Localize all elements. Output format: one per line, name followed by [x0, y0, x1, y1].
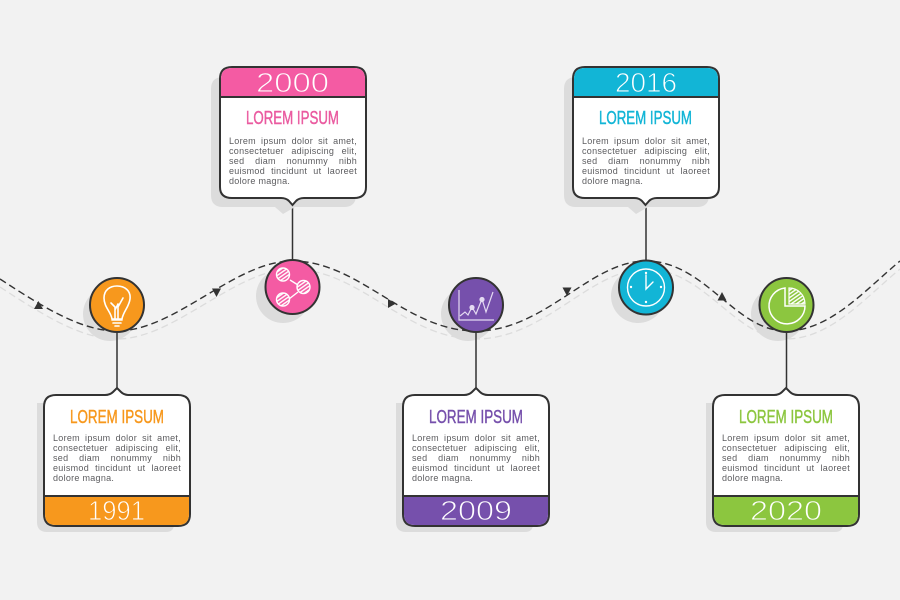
- panel: 1991: [37, 387, 191, 532]
- panel: 2000: consectetuer adipiscing elit,: [229, 146, 357, 156]
- timeline shadow path: [0, 269, 900, 339]
- icon: light bulb node: [90, 278, 144, 332]
- panel: 2009: consectetuer adipiscing elit,: [412, 443, 540, 453]
- panel: 2020: Lorem ipsum dolor sit amet,: [722, 433, 850, 443]
- panel: 2020: euismod tincidunt ut laoreet: [722, 463, 850, 473]
- arrow 3: [388, 299, 396, 308]
- panel: 2000: dolore magna.: [229, 176, 290, 186]
- timeline dashed path: [0, 261, 900, 331]
- panel: 2000: euismod tincidunt ut laoreet: [229, 166, 357, 176]
- panel: 1991: 1991: [88, 495, 145, 526]
- panel: 2000: 2000: [256, 67, 329, 98]
- connector lines: [117, 204, 786, 389]
- arrow 1: [34, 301, 43, 309]
- panel: 2016: [564, 66, 720, 214]
- panel: 2020: [706, 386, 860, 532]
- panel: 2020: 2020: [750, 495, 822, 526]
- panel: 2009: 2009: [440, 495, 512, 526]
- circle shadows: [83, 269, 805, 341]
- icon: line chart node: [449, 278, 503, 332]
- panel: 2020: dolore magna.: [722, 473, 783, 483]
- panel: 2016: sed diam nonummy nibh: [582, 156, 710, 166]
- panel: 2000: [211, 66, 367, 214]
- panel: 2016: consectetuer adipiscing elit,: [582, 146, 710, 156]
- panel: 2009: [396, 387, 550, 532]
- icon: pie chart node: [760, 278, 814, 332]
- panel: 1991: LOREM IPSUM: [70, 407, 164, 427]
- panel: 2020: sed diam nonummy nibh: [722, 453, 850, 463]
- panel: 2016: Lorem ipsum dolor sit amet,: [582, 136, 710, 146]
- panel: 2000: LOREM IPSUM: [246, 108, 339, 128]
- panel: 2009: euismod tincidunt ut laoreet: [412, 463, 540, 473]
- panel: 2009: sed diam nonummy nibh: [412, 453, 540, 463]
- panel: 2020: consectetuer adipiscing elit,: [722, 443, 850, 453]
- panel: 2016: dolore magna.: [582, 176, 643, 186]
- panel: 2000: sed diam nonummy nibh: [229, 156, 357, 166]
- icon: share node: [266, 260, 320, 314]
- panel: 1991: consectetuer adipiscing elit,: [53, 443, 181, 453]
- panel: 2016: euismod tincidunt ut laoreet: [582, 166, 710, 176]
- panel: 1991: Lorem ipsum dolor sit amet,: [53, 433, 181, 443]
- panel: 2009: Lorem ipsum dolor sit amet,: [412, 433, 540, 443]
- panel: 2016: LOREM IPSUM: [599, 108, 692, 128]
- panel: 2016: 2016: [615, 67, 677, 98]
- panel: 2009: LOREM IPSUM: [429, 407, 523, 427]
- arrow 4: [562, 288, 572, 296]
- panel: 2009: dolore magna.: [412, 473, 473, 483]
- arrow 2: [212, 288, 221, 297]
- panel: 1991: sed diam nonummy nibh: [53, 453, 181, 463]
- panel: 2020: LOREM IPSUM: [739, 407, 833, 427]
- panel: 1991: euismod tincidunt ut laoreet: [53, 463, 181, 473]
- panel: 2000: Lorem ipsum dolor sit amet,: [229, 136, 357, 146]
- panel: 1991: dolore magna.: [53, 473, 114, 483]
- icon: clock node: [619, 260, 673, 314]
- arrow 5: [718, 292, 726, 300]
